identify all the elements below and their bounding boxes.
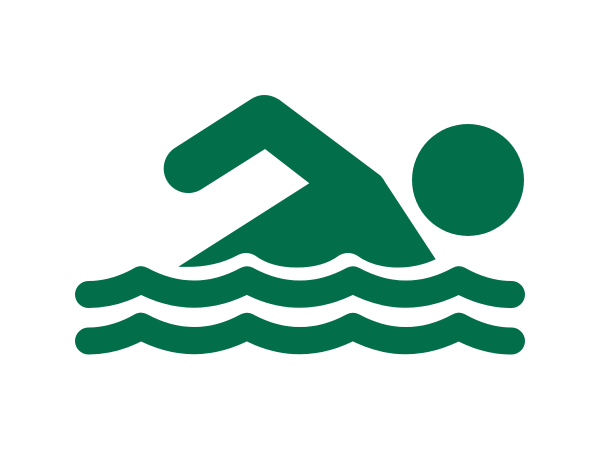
icon: upper wave — [88, 280, 512, 294]
icon: swimmer body and arm — [164, 95, 436, 268]
icon: lower wave — [88, 326, 512, 341]
icon: swimmer head — [412, 124, 524, 236]
